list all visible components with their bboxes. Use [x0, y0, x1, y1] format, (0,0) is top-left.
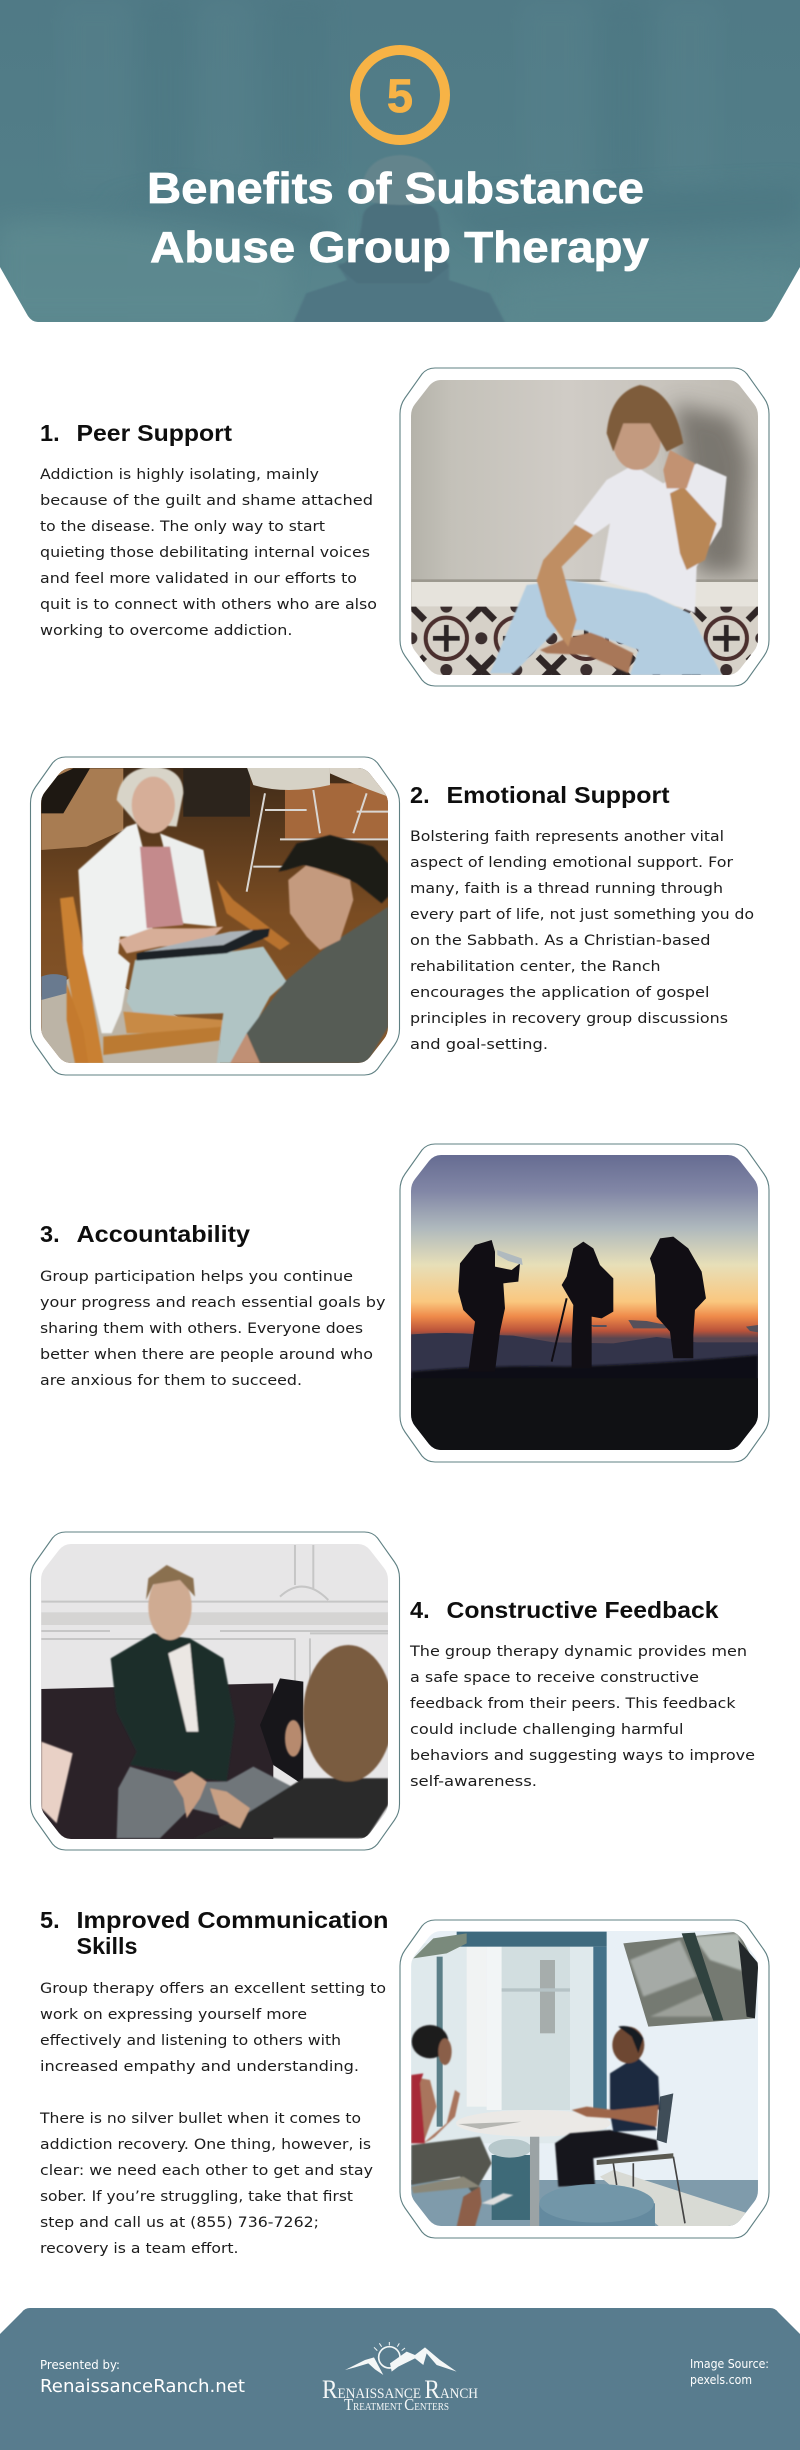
text block: Peer Support body: quit is to connect with others who are also — [40, 597, 377, 613]
photo frame: man sitting on floor — [400, 368, 769, 686]
text block: Constructive Feedback body: behaviors and suggesting ways to improve — [410, 1748, 755, 1764]
text: image source — [690, 2357, 769, 2387]
text block: Accountability body: Group participation helps you continue — [40, 1269, 353, 1285]
heading: Constructive Feedback: 4. — [410, 1597, 430, 1623]
text block: Constructive Feedback body: The group therapy dynamic provides men — [409, 1644, 747, 1660]
logo: Renaissance Ranch: RENAISSANCE RANCH — [322, 2375, 478, 2404]
heading: Accountability: 3. — [40, 1221, 60, 1247]
text block: Emotional Support body: every part of life, not just something you do — [410, 907, 754, 923]
text block: Emotional Support body: aspect of lending emotional support. For — [410, 855, 733, 871]
text block: Constructive Feedback body: self-awareness. — [410, 1774, 537, 1790]
text: presented by — [40, 2358, 245, 2397]
silhouette: hiker with long hair — [650, 1237, 706, 1358]
text: image source: Image Source: — [690, 2357, 769, 2371]
text block: Constructive Feedback body: feedback from their peers. This feedback — [410, 1696, 736, 1712]
text block: Improved Communication body: sober. If you’re struggling, take that first — [40, 2189, 353, 2205]
text block: Constructive Feedback body: a safe space to receive constructive — [410, 1670, 699, 1686]
panel: 5 Improved Communication Skills — [39, 1907, 769, 2257]
heading: Improved Communication Skills: Skills — [76, 1933, 138, 1959]
text block: Emotional Support body — [410, 829, 754, 1053]
text: presented by: Presented by: — [40, 2358, 120, 2372]
text: image source: pexels.com — [690, 2373, 752, 2387]
text block: Emotional Support body: principles in recovery group discussions — [410, 1011, 728, 1027]
text block: Accountability body: are anxious for them to succeed. — [40, 1373, 302, 1389]
heading: Improved Communication Skills: 5. — [40, 1907, 60, 1933]
title — [147, 164, 650, 272]
text block: Peer Support body: to the disease. The only way to start — [40, 519, 325, 535]
text block: Peer Support body — [40, 467, 377, 639]
heading: Emotional Support: Emotional Support — [446, 782, 670, 808]
badge: number 5 in circle: 5 — [387, 69, 413, 122]
text block: Improved Communication body: There is no silver bullet when it comes to — [39, 2111, 361, 2127]
text: presented by: RenaissanceRanch.net — [40, 2376, 245, 2397]
title: Abuse Group Therapy — [150, 223, 650, 272]
silhouette: hiker with pole — [562, 1242, 613, 1368]
text block: Accountability body: your progress and reach essential goals by — [40, 1295, 386, 1311]
text block: Emotional Support body: Bolstering faith represents another vital — [410, 829, 724, 845]
badge: number 5 in circle — [355, 50, 445, 140]
panel: 3 Accountability — [40, 1144, 769, 1462]
text block: Improved Communication body: effectively and listening to others with — [40, 2033, 341, 2049]
text block: Accountability body: better when there are people around who — [40, 1347, 373, 1363]
footer band — [0, 2308, 800, 2450]
text block: Accountability body — [40, 1269, 386, 1389]
heading: Improved Communication Skills — [40, 1907, 388, 1959]
heading: Accountability: Accountability — [76, 1221, 250, 1247]
photo frame: two people talking at table — [400, 1920, 769, 2238]
text block: Improved Communication body: increased empathy and understanding. — [40, 2059, 359, 2075]
text block: Peer Support body: because of the guilt and shame attached — [40, 493, 373, 509]
photo: person seen from behind — [293, 155, 505, 323]
logo: Renaissance Ranch: TREATMENT CENTERS — [344, 2395, 449, 2414]
heading: Constructive Feedback: Constructive Feedback — [446, 1597, 719, 1623]
text block: Improved Communication body — [39, 1981, 386, 2257]
text block: Improved Communication body: work on expressing yourself more — [40, 2007, 307, 2023]
text block: Peer Support body: Addiction is highly isolating, mainly — [40, 467, 319, 483]
text block: Emotional Support body: on the Sabbath. As a Christian-based — [410, 933, 710, 949]
text block: Peer Support body: and feel more validated in our efforts to — [40, 571, 357, 587]
text block: Emotional Support body: many, faith is a thread running through — [410, 881, 723, 897]
text block: Improved Communication body: clear: we need each other to get and stay — [40, 2163, 373, 2179]
text block: Improved Communication body: addiction recovery. One thing, however, is — [40, 2137, 371, 2153]
heading: Peer Support: 1. — [40, 420, 60, 446]
panel: 1 Peer Support — [40, 368, 769, 686]
text block: Constructive Feedback body — [409, 1644, 755, 1790]
photo frame: hikers silhouetted at sunset — [400, 1144, 769, 1462]
text block: Constructive Feedback body: could include challenging harmful — [410, 1722, 684, 1738]
text block: Improved Communication body: recovery is a team effort. — [40, 2241, 238, 2257]
text block: Improved Communication body: step and call us at (855) 736-7262; — [40, 2215, 319, 2231]
photo frame: young man on sofa in session — [30, 1532, 400, 1850]
panel: 4 Constructive Feedback — [30, 1532, 755, 1850]
heading: Improved Communication Skills: Improved Communication — [76, 1907, 388, 1933]
heading: Peer Support: Peer Support — [76, 420, 232, 446]
header banner — [0, 0, 800, 323]
text block: Emotional Support body: rehabilitation center, the Ranch — [410, 959, 660, 975]
logo: Renaissance Ranch — [322, 2342, 478, 2414]
text block: Peer Support body: working to overcome addiction. — [40, 623, 292, 639]
text block: Emotional Support body: encourages the application of gospel — [410, 985, 710, 1001]
title: Benefits of Substance — [147, 164, 644, 213]
heading: Emotional Support: 2. — [410, 782, 430, 808]
text block: Improved Communication body: Group therapy offers an excellent setting to — [40, 1981, 386, 1997]
text block: Emotional Support body: and goal-setting. — [410, 1037, 548, 1053]
text block: Peer Support body: quieting those debilitating internal voices — [40, 545, 370, 561]
text block: Accountability body: sharing them with others. Everyone does — [40, 1321, 363, 1337]
panel: 2 Emotional Support — [30, 757, 754, 1075]
photo frame: therapist and client — [30, 757, 400, 1075]
silhouette: hiker drinking — [458, 1240, 520, 1372]
